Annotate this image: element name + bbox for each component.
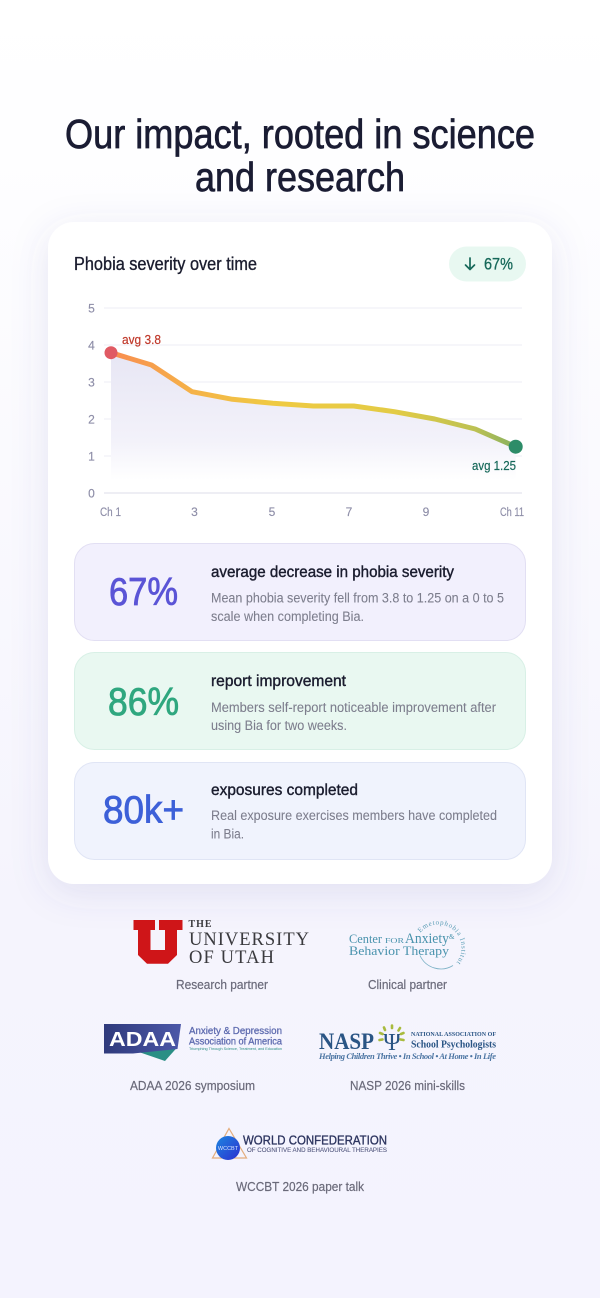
stat card: 67% [74, 544, 526, 640]
partner: Center for Anxiety and Behavior Therapy: Clinical partner [368, 977, 448, 992]
stat card: 80k+: in Bia. [211, 826, 244, 842]
partner: NASP: NASP [319, 1029, 374, 1054]
partner: NASP: School Psychologists [411, 1038, 497, 1050]
partner: NASP: NASP 2026 mini-skills [350, 1078, 465, 1093]
line chart: phobia severity: 7 [346, 505, 353, 519]
partner: ADAA [104, 1024, 282, 1093]
partner: University of Utah: UNIVERSITY [189, 930, 309, 950]
panel: results card [48, 222, 552, 884]
partner: ADAA: ADAA 2026 symposium [130, 1078, 255, 1093]
line chart: phobia severity: 3 [88, 376, 95, 390]
partner: WCCBT: WCCBT 2026 paper talk [236, 1179, 364, 1194]
badge: 67% decrease [449, 246, 526, 282]
line chart: phobia severity [88, 302, 524, 519]
partner: University of Utah: THE [188, 919, 212, 930]
partner: Center for Anxiety and Behavior Therapy: FOR [385, 936, 404, 945]
line chart: phobia severity: 3 [191, 505, 198, 519]
partner: Center for Anxiety and Behavior Therapy: Anxiety [405, 931, 450, 947]
logo: block U [134, 920, 182, 964]
line chart: phobia severity: 0 [88, 486, 95, 500]
partner: Center for Anxiety and Behavior Therapy: & [449, 933, 455, 941]
line chart: phobia severity: 1 [88, 450, 95, 464]
stat card: 80k+: 80k+ [103, 789, 184, 832]
partner: WCCBT: OF COGNITIVE AND BEHAVIOURAL THERAPIES [247, 1148, 387, 1154]
partner: NASP: Helping Children Thrive • In School • At Home • In Life [318, 1051, 496, 1061]
line chart: phobia severity: 5 [269, 505, 276, 519]
title: Our impact, rooted in science [65, 111, 535, 157]
line chart: phobia severity: Ch 11 [500, 507, 524, 519]
partner: ADAA: Association of America [189, 1036, 282, 1048]
partner: ADAA: Triumphing Through Science, Treatment, and Education [189, 1047, 282, 1051]
stat card: 67%: Mean phobia severity fell from 3.8 to 1.25 on a 0 to 5 [211, 590, 504, 606]
stat card: 80k+: exposures completed [211, 782, 358, 799]
badge: 67% decrease: 67% [484, 256, 513, 274]
stat card: 80k+ [74, 762, 526, 860]
stat card: 86%: report improvement [211, 673, 347, 690]
line chart: phobia severity: 5 [88, 302, 95, 316]
title: and research [195, 154, 405, 200]
line chart: phobia severity: Ch 1 [100, 507, 121, 519]
stat card: 86%: Members self-report noticeable improvement after [211, 700, 496, 715]
stat card: 67%: scale when completing Bia. [211, 609, 364, 624]
partner: University of Utah: OF UTAH [189, 948, 274, 968]
partner: University of Utah [134, 919, 309, 992]
partner: NASP [318, 1026, 497, 1093]
partner: Center for Anxiety and Behavior Therapy: Emetophobia Institute [417, 920, 466, 964]
partner: Center for Anxiety and Behavior Therapy [349, 920, 466, 992]
partner: ADAA: Anxiety & Depression [189, 1026, 282, 1037]
stat card: 67%: average decrease in phobia severity [211, 564, 454, 581]
stat card: 86%: 86% [108, 681, 179, 724]
partner: Center for Anxiety and Behavior Therapy: Behavior Therapy [349, 943, 450, 958]
line chart: phobia severity: avg 1.25 [472, 458, 516, 473]
title [65, 111, 535, 200]
stat card: 67%: 67% [109, 571, 178, 614]
partner: NASP: Ψ [383, 1030, 401, 1056]
line chart: phobia severity: 2 [88, 412, 95, 426]
chart heading: Phobia severity over time [74, 254, 257, 274]
line chart: phobia severity: 4 [88, 338, 95, 352]
stat card: 86%: using Bia for two weeks. [211, 718, 347, 733]
partner: WCCBT: WORLD CONFEDERATION [243, 1132, 387, 1148]
line chart: phobia severity: avg 3.8 [122, 332, 161, 347]
partner: ADAA: ADAA [109, 1029, 176, 1051]
partner: University of Utah: Research partner [176, 977, 269, 992]
stat card: 80k+: Real exposure exercises members have completed [211, 808, 497, 823]
partner: WCCBT: WCCBT [218, 1146, 239, 1152]
partner: Center for Anxiety and Behavior Therapy: Center [349, 931, 383, 946]
stat card: 86% [74, 652, 526, 750]
line chart: phobia severity: 9 [423, 505, 430, 519]
partner: NASP: NATIONAL ASSOCIATION OF [411, 1032, 496, 1038]
partner: WCCBT [212, 1128, 387, 1194]
